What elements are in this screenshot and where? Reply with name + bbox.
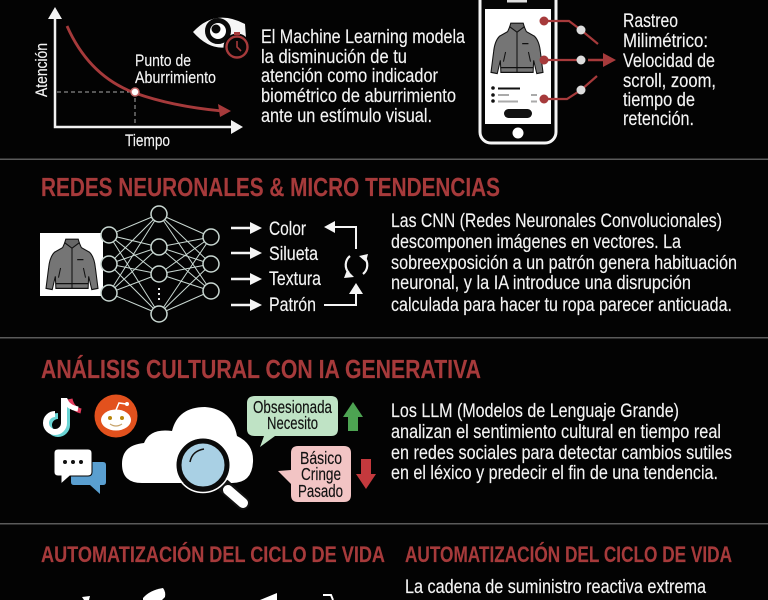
feature arrows: [231, 222, 262, 311]
feature labels: Color: [269, 218, 306, 240]
icon: eye with stopwatch: [193, 18, 250, 60]
line chart: attention over time: [32, 7, 243, 150]
line chart: attention over time: Tiempo: [125, 131, 170, 150]
text block: millimetric tracking: scroll, zoom,: [623, 70, 716, 92]
icon: cloud with magnifier: [122, 407, 253, 503]
panel: lifecycle automation: [41, 542, 732, 600]
icon: tiktok: [46, 398, 81, 434]
text block: machine learning: la disminución de tu: [261, 46, 407, 68]
icon: green up arrow: [343, 402, 363, 431]
text block: machine learning: atención como indicador: [261, 65, 438, 87]
text block: CNN: [391, 210, 737, 316]
text block: LLM: [391, 400, 732, 484]
text block: machine learning: [261, 26, 465, 127]
heading: neural networks: REDES NEURONALES & MICRO TENDENCIAS: [41, 172, 500, 202]
text block: machine learning: El Machine Learning modela: [261, 26, 465, 48]
heading: cultural analysis: ANÁLISIS CULTURAL CON IA GENERATIVA: [41, 354, 481, 384]
panel: neural networks: [40, 172, 737, 322]
text block: millimetric tracking: tiempo de: [623, 89, 695, 111]
callout: positive terms: [247, 396, 338, 447]
icon: feedback cycle: [324, 221, 368, 305]
text block: LLM: Los LLM (Modelos de Lenguaje Grande): [391, 400, 679, 422]
text block: millimetric tracking: Rastreo: [623, 10, 678, 32]
callout: positive terms: Necesito: [267, 413, 318, 433]
text block: supply chain: La cadena de suministro reactiva extrema: [405, 576, 706, 598]
diagram: neural network: [101, 206, 219, 322]
icon: reddit: [94, 394, 138, 438]
icon: phone with tracking points: [480, 0, 616, 143]
feature labels: Patrón: [269, 294, 316, 316]
callout: negative terms: Cringe: [301, 464, 341, 484]
icon: chat bubbles: [54, 449, 106, 494]
text block: millimetric tracking: Velocidad de: [623, 50, 715, 72]
feature labels: [269, 218, 321, 316]
line chart: attention over time: Atención: [32, 43, 51, 97]
panel: attention curve and tracking: [32, 0, 716, 150]
heading: lifecycle automation left: AUTOMATIZACIÓN DEL CICLO DE VIDA: [41, 542, 385, 567]
icon: jacket input image: [40, 233, 103, 296]
callout: negative terms: Pasado: [298, 481, 343, 501]
icons: cropped lifecycle icons: [82, 588, 333, 600]
text block: millimetric tracking: retención.: [623, 108, 694, 130]
text block: machine learning: biométrico de aburrimiento: [261, 85, 456, 107]
panel: cultural analysis: [41, 354, 732, 503]
text block: machine learning: ante un estímulo visual.: [261, 105, 432, 127]
text block: CNN: descomponen imágenes en vectores. La: [391, 231, 681, 253]
text block: millimetric tracking: Milimétrico:: [623, 30, 708, 52]
callout: positive terms: Obsesionada: [253, 397, 332, 417]
feature labels: Textura: [269, 268, 321, 290]
text block: millimetric tracking: [623, 10, 716, 130]
feature labels: Silueta: [269, 243, 318, 265]
callout: negative terms: Básico: [300, 448, 342, 468]
text block: CNN: neuronal, y la IA introduce una disrupción: [391, 272, 691, 294]
line chart: attention over time: Punto de: [135, 51, 191, 70]
line chart: attention over time: Aburrimiento: [135, 68, 216, 87]
icon: red down arrow: [356, 459, 376, 489]
callout: negative terms: [278, 446, 351, 502]
